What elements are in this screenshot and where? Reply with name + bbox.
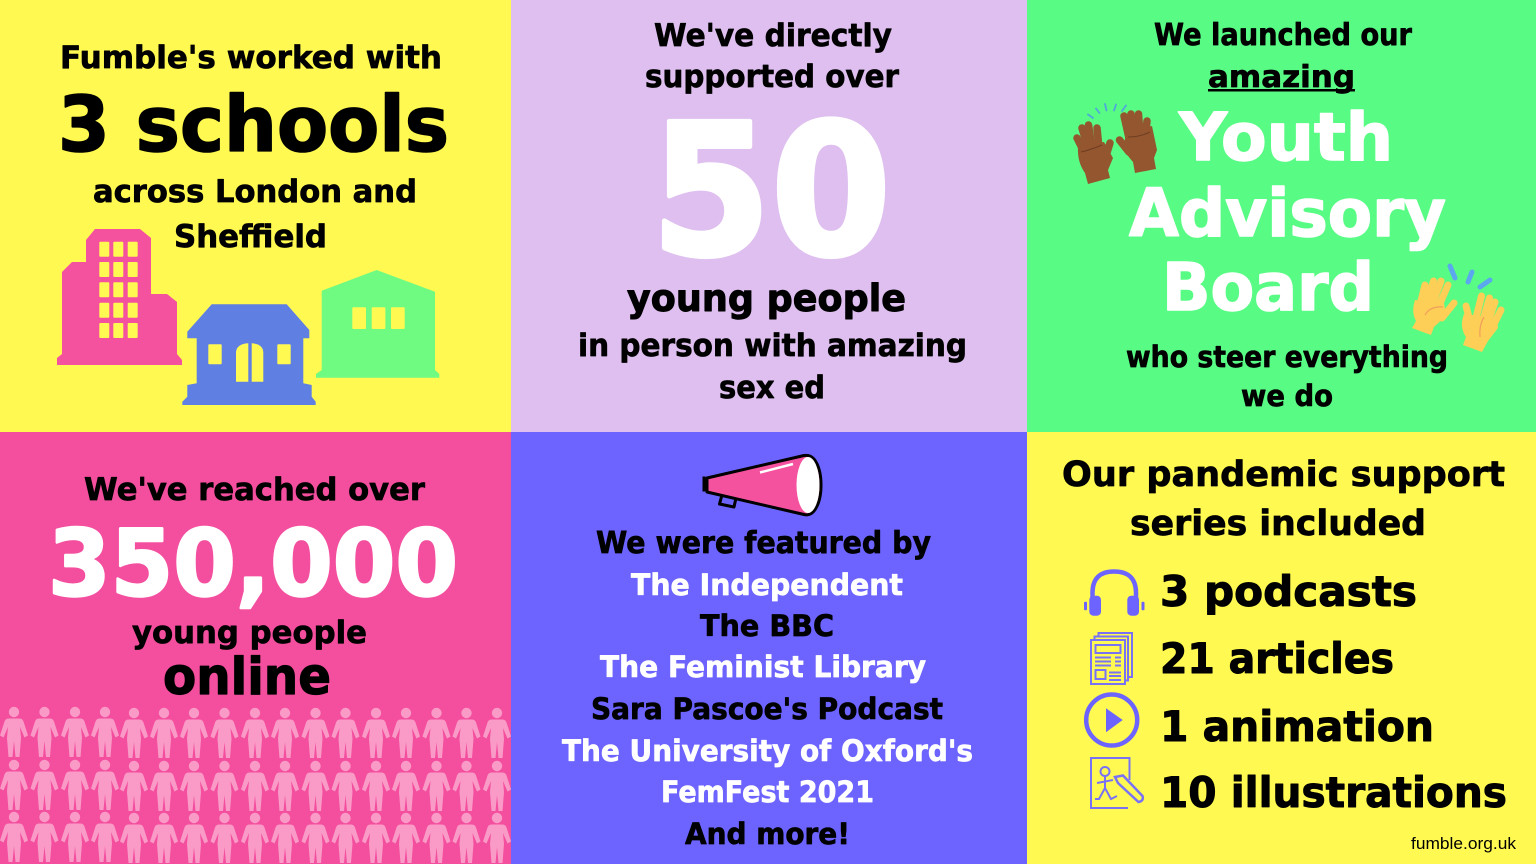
text: And more!: And more!: [685, 817, 850, 851]
text: FemFest 2021: FemFest 2021: [661, 775, 874, 809]
panel: young people supported: [511, 0, 1027, 432]
text: 10 illustrations: 10 illustrations: [1160, 768, 1507, 817]
text: 3 podcasts: 3 podcasts: [1160, 567, 1417, 616]
text: across London and: across London and: [93, 174, 417, 210]
icon: articles: [1091, 633, 1132, 684]
big number: 3 schools: 3 schools: [58, 81, 449, 170]
text: website: fumble.org.uk: [1411, 834, 1517, 853]
icon: play button: [1086, 694, 1137, 746]
panel: youth advisory board: [1027, 0, 1536, 432]
icon grid: rows of people: [0, 707, 511, 863]
heading: supported over: supported over: [645, 59, 900, 95]
panel: schools: [0, 0, 511, 432]
panel: press features: [511, 432, 1027, 864]
icon: blue school house: [182, 304, 316, 405]
panel: online reach: [0, 432, 511, 864]
heading: We've reached over: We've reached over: [84, 472, 426, 508]
text: young people: young people: [132, 615, 367, 651]
text: in person with amazing: in person with amazing: [578, 328, 967, 364]
big number: 350,000: 350,000: [48, 510, 458, 617]
big text: Board: Board: [1162, 249, 1374, 326]
text: Sara Pascoe's Podcast: Sara Pascoe's Podcast: [591, 692, 943, 726]
text: The University of Oxford's: The University of Oxford's: [562, 734, 973, 768]
big text: Advisory: Advisory: [1129, 175, 1446, 252]
heading: We launched our: We launched our: [1154, 18, 1412, 53]
text: Sheffield: Sheffield: [174, 219, 327, 255]
icon: brown raised hands: [1077, 104, 1157, 184]
heading: We've directly: We've directly: [654, 18, 892, 54]
text: We were featured by: We were featured by: [596, 526, 931, 561]
icon: yellow raised hands: [1412, 266, 1501, 352]
text: sex ed: sex ed: [719, 370, 825, 406]
text: The Feminist Library: The Feminist Library: [600, 650, 926, 684]
text: The BBC: The BBC: [700, 609, 834, 643]
big number: 50: 50: [651, 85, 891, 297]
big text: online: online: [163, 648, 331, 707]
text: who steer everything: who steer everything: [1126, 340, 1448, 374]
text: The Independent: The Independent: [631, 568, 903, 602]
text: we do: we do: [1241, 379, 1333, 413]
big text: Youth: Youth: [1178, 99, 1393, 176]
text: young people: young people: [627, 277, 906, 320]
text: 1 animation: 1 animation: [1160, 702, 1434, 751]
heading: Fumble's worked with: Fumble's worked with: [60, 40, 442, 76]
heading: Our pandemic support: Our pandemic support: [1062, 455, 1505, 495]
heading: series included: series included: [1130, 504, 1426, 544]
icon: illustration page with pencil: [1091, 758, 1143, 808]
icon: green building: [316, 270, 439, 378]
icon: megaphone: [704, 455, 821, 515]
heading: amazing underlined: amazing: [1208, 60, 1355, 95]
icon: pink tower building: [57, 229, 182, 365]
text: 21 articles: 21 articles: [1160, 634, 1394, 683]
icon: headphones: [1084, 572, 1144, 616]
panel: pandemic support series: [1027, 432, 1536, 864]
